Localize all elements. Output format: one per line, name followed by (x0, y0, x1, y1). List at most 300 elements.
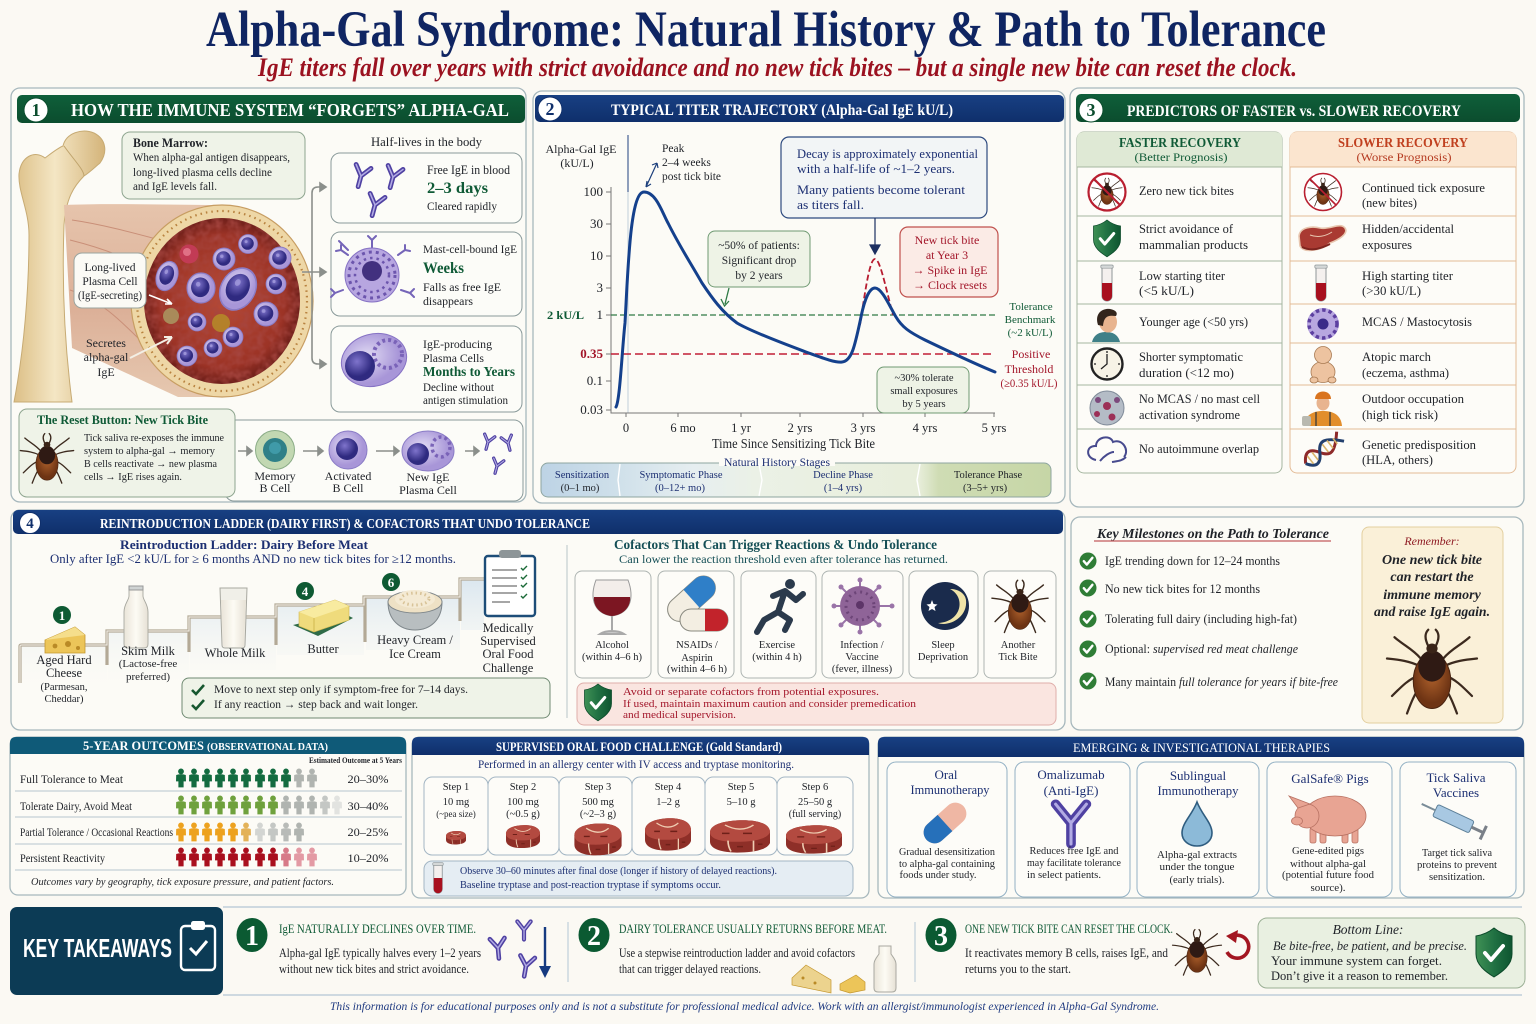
ladder rule box: Move to next step only if symptom-free for 7–14 days. (214, 682, 468, 696)
line chart: IgE titer over time (546, 135, 1006, 451)
table: faster recovery: Strict avoidance of (1139, 222, 1234, 236)
cofactor: sleep deprivation: Sleep (931, 640, 955, 651)
takeaway 3: returns you to the start. (965, 962, 1071, 976)
panel 1: how the immune system forgets (11, 88, 526, 502)
label: secretes alpha-gal IgE: IgE (97, 365, 115, 379)
callout: 30 percent tolerate: small exposures (890, 386, 958, 397)
natural history stages bar: Decline Phase (813, 470, 873, 481)
therapy: sublingual immunotherapy: Immunotherapy (1158, 783, 1239, 798)
callout: decay: Many patients become tolerant (797, 182, 965, 197)
line chart: IgE titer over time: 3 (596, 280, 603, 295)
row: full tolerance (20, 768, 388, 787)
row: partial tolerance: 20–25% (348, 825, 388, 839)
half-life box: mast-cell-bound IgE (331, 232, 522, 316)
pathway: memory B cell to new plasma cell: B Cell (332, 481, 364, 495)
therapy: GalSafe pigs: source). (1310, 882, 1346, 894)
key takeaways badge: KEY TAKEAWAYS (23, 933, 172, 963)
step 2: skim milk: preferred) (126, 671, 170, 683)
callout: reset button: B cells reactivate → new plasma (84, 458, 217, 470)
heading: half-lives: Half-lives in the body (371, 135, 483, 149)
label: positive threshold: Positive (1012, 347, 1050, 361)
step 2: skim milk: (Lactose-free (119, 658, 177, 670)
step 4: butter: Butter (307, 642, 339, 656)
table: faster recovery: Low starting titer (1139, 269, 1226, 283)
row: full tolerance: Full Tolerance to Meat (20, 772, 124, 786)
table: slower recovery (1290, 132, 1516, 473)
takeaway 1: Alpha-gal IgE typically halves every 1–2 years (279, 946, 481, 960)
cofactor: alcohol (575, 571, 651, 678)
callout: long-lived plasma cell: (IgE-secreting) (78, 290, 142, 302)
callout: long-lived plasma cell: Long-lived (84, 262, 136, 274)
takeaway 2: DAIRY TOLERANCE USUALLY RETURNS BEFORE MEAT. (619, 922, 887, 936)
line chart: IgE titer over time: 0.35 (580, 346, 604, 361)
row: tolerate dairy (20, 796, 388, 814)
subtitle: IgE titers fall over years with strict avoidance and no new tick bites – but a single new bite can reset the clock. (257, 53, 1297, 82)
line chart: IgE titer over time: 1 yr (731, 421, 752, 435)
step 6: 25–50 g (798, 797, 833, 808)
line chart: IgE titer over time: 10 (590, 248, 603, 263)
annotation: peak: Peak (662, 143, 685, 155)
natural history stages bar (541, 457, 1051, 497)
icon: younger person (1092, 309, 1120, 342)
step 1: 10 mg (443, 797, 470, 808)
ladder rule box: If any reaction → step back and wait longer. (214, 697, 418, 711)
icon: no ticks (1088, 174, 1126, 210)
callout: 30 percent tolerate (877, 367, 969, 413)
panel 4 header: 4 (26, 516, 34, 532)
cofactors heading: Cofactors That Can Trigger Reactions & Undo Tolerance (614, 538, 937, 553)
step 6: clipboard (480, 550, 537, 675)
step 6: clipboard: Supervised (480, 634, 537, 648)
step 6: clipboard: Medically (483, 621, 534, 635)
half-life box: free IgE (331, 153, 522, 223)
half-life box: free IgE: 2–3 days (427, 180, 488, 197)
step 3: whole milk: Whole Milk (205, 646, 266, 660)
table: slower recovery: SLOWER RECOVERY (1338, 136, 1468, 151)
pathway: memory B cell to new plasma cell: New IgE (407, 470, 449, 484)
step 1: aged hard cheese: Aged Hard (36, 653, 92, 667)
callout: remember: can restart the (1390, 570, 1474, 585)
arrow: 50 percent pointer (721, 288, 729, 306)
panel 3 header (1076, 94, 1520, 122)
callout: new tick bite (900, 227, 998, 297)
therapy: sublingual immunotherapy: Sublingual (1170, 768, 1227, 783)
panel 4: reintroduction ladder and cofactors (11, 510, 1065, 730)
cofactor: another tick bite (984, 571, 1056, 678)
callout: reset button: system to alpha-gal → memory (84, 445, 215, 457)
callout: remember (1362, 527, 1503, 723)
cofactor warning: If used, maintain maximum caution and consider premedication (623, 698, 917, 710)
callout: remember: One new tick bite (1382, 553, 1482, 568)
table: slower recovery: Atopic march (1362, 350, 1432, 364)
therapy: tick saliva vaccines: sensitization. (1429, 871, 1485, 883)
cofactor: sleep deprivation: Deprivation (918, 652, 969, 663)
step 5: heavy cream: Ice Cream (389, 647, 441, 661)
therapy: sublingual immunotherapy: (early trials). (1170, 874, 1225, 886)
half-life box: free IgE: Cleared rapidly (427, 199, 497, 213)
ladder heading: Only after IgE <2 kU/L for ≥ 6 months AND no new tick bites for ≥12 months. (50, 552, 456, 566)
half-life box: IgE-producing plasma cells: Plasma Cells (423, 351, 484, 365)
annotation: peak: post tick bite (662, 171, 721, 183)
panel 4 header: REINTRODUCTION LADDER (DAIRY FIRST) & COFACTORS THAT UNDO TOLERANCE (100, 516, 590, 531)
callout: 50 percent of patients: Significant drop (722, 255, 796, 267)
table: faster recovery: Shorter symptomatic (1139, 350, 1243, 364)
table: slower recovery: Outdoor occupation (1362, 392, 1465, 406)
icon: outdoor worker (1302, 392, 1342, 426)
cofactor: infection: Vaccine (845, 652, 879, 663)
panel 3 header: 3 (1086, 100, 1096, 120)
takeaway 2 (578, 918, 896, 993)
table: faster recovery: Younger age (<50 yrs) (1139, 315, 1248, 329)
row: full tolerance: 20–30% (348, 772, 388, 786)
callout: 50 percent of patients: ~50% of patients: (718, 240, 800, 252)
ladder heading (50, 537, 456, 566)
outcomes header: 5-YEAR OUTCOMES (OBSERVATIONAL DATA) (83, 738, 328, 753)
therapy: omalizumab: Omalizumab (1037, 767, 1105, 782)
label: tolerance benchmark: (~2 kU/L) (1008, 327, 1053, 339)
table: faster recovery: No autoimmune overlap (1139, 442, 1259, 456)
line chart: IgE titer over time: 0 (623, 421, 629, 435)
line chart: IgE titer over time: 30 (590, 216, 603, 231)
step 5: heavy cream: 6 (388, 575, 395, 590)
cofactor: exercise: Exercise (759, 640, 795, 651)
natural history stages bar: (3–5+ yrs) (963, 483, 1008, 494)
half-life box: free IgE: Free IgE in blood (427, 163, 511, 177)
cofactor: exercise: (within 4 h) (752, 652, 802, 663)
panel: supervised oral food challenge: Performed in an allergy center with IV access and tryptase monitoring. (478, 759, 794, 771)
therapy: oral immunotherapy: Gradual desensitization (899, 846, 995, 858)
step 4: 1–2 g (656, 797, 681, 808)
takeaway 1: without new tick bites and strict avoidance. (279, 962, 469, 976)
panel: key milestones (1071, 517, 1523, 730)
pathway: memory B cell to new plasma cell: Activated (325, 469, 371, 483)
bottom line callout (1258, 918, 1525, 988)
milestones list: IgE trending down for 12–24 months (1105, 554, 1280, 568)
step 1: aged hard cheese: Cheese (46, 666, 82, 680)
step 1: aged hard cheese (36, 606, 92, 705)
cofactor warning (577, 683, 1056, 725)
ladder rule box (182, 678, 550, 718)
half-life box: mast-cell-bound IgE: Weeks (423, 260, 464, 277)
half-life box: mast-cell-bound IgE: disappears (423, 294, 473, 308)
callout: remember: Remember: (1403, 534, 1460, 548)
line chart: IgE titer over time: (kU/L) (560, 156, 594, 170)
label: secretes alpha-gal IgE: Secretes (86, 336, 126, 350)
table: slower recovery: (new bites) (1362, 196, 1417, 210)
bottom line callout: Bottom Line: (1333, 922, 1403, 937)
table: slower recovery: exposures (1362, 238, 1412, 252)
panel: 5-year outcomes: Estimated Outcome at 5 Years (309, 755, 403, 765)
therapy: tick saliva vaccines: proteins to prevent (1417, 859, 1497, 871)
natural history stages bar: Symptomatic Phase (639, 470, 723, 481)
line chart: IgE titer over time: 4 yrs (913, 421, 937, 435)
milestones list (1080, 552, 1338, 690)
step 4 (632, 777, 705, 855)
therapy: omalizumab (1015, 762, 1130, 897)
outcomes footnote: Outcomes vary by geography, tick exposure pressure, and patient factors. (31, 876, 334, 888)
step 5 (705, 777, 777, 855)
cofactor warning: Avoid or separate cofactors from potential exposures. (623, 686, 879, 698)
cofactor: infection: Infection / (840, 640, 884, 651)
line chart: IgE titer over time: 2 kU/L (547, 308, 584, 322)
callout: reset button: The Reset Button: New Tick Bite (37, 413, 208, 427)
cofactor: sleep deprivation (909, 571, 978, 678)
takeaway 2: 2 (587, 921, 601, 952)
panel 2 header: 2 (546, 99, 554, 119)
therapy: GalSafe pigs: (potential future food (1282, 869, 1374, 881)
cofactor: infection: (fever, illness) (832, 664, 893, 675)
row: persistent reactivity: 10–20% (348, 851, 388, 865)
illustration: femur bone (14, 131, 105, 402)
pathway: memory B cell to new plasma cell: Memory (254, 469, 296, 483)
row: partial tolerance (20, 822, 388, 841)
row: tolerate dairy: 30–40% (348, 799, 388, 813)
callout: 30 percent tolerate: ~30% tolerate (894, 373, 954, 384)
half-life box: mast-cell-bound IgE: Falls as free IgE (423, 280, 501, 294)
step 3: whole milk (205, 588, 266, 660)
callout: bone marrow (122, 132, 305, 199)
step 1: (~pea size) (436, 809, 476, 819)
pathway: memory B cell to new plasma cell: B Cell (259, 481, 291, 495)
takeaway 3: 3 (934, 921, 948, 952)
panel: supervised oral food challenge (412, 737, 869, 898)
milestones list: Many maintain full tolerance for years if bite-free (1105, 675, 1338, 689)
takeaway 1 (236, 918, 551, 978)
milestones heading: Key Milestones on the Path to Tolerance (1096, 527, 1329, 542)
icon: DNA (1301, 431, 1345, 469)
cofactor warning: and medical supervision. (623, 709, 736, 721)
callout: new tick bite: → Spike in IgE (912, 263, 988, 277)
cofactor: alcohol: Alcohol (595, 640, 629, 651)
takeaway 3: It reactivates memory B cells, raises IgE, and (965, 946, 1169, 960)
callout: bone marrow: long-lived plasma cells decline (133, 167, 272, 179)
takeaway 1: IgE NATURALLY DECLINES OVER TIME. (279, 922, 476, 936)
line chart: IgE titer over time: Alpha-Gal IgE (546, 142, 616, 156)
step 4: butter (293, 582, 353, 656)
line chart: IgE titer over time: 100 (584, 184, 603, 199)
takeaway 2: that can trigger delayed reactions. (619, 962, 761, 976)
callout: long-lived plasma cell (74, 253, 146, 308)
therapy: oral immunotherapy: to alpha-gal containing (899, 858, 995, 870)
line chart: IgE titer over time: 0.03 (580, 402, 603, 417)
therapy: GalSafe pigs (1267, 762, 1392, 897)
therapy: omalizumab: (Anti-IgE) (1044, 783, 1098, 798)
table: slower recovery: Continued tick exposure (1362, 181, 1485, 195)
icon: blood tube (1101, 265, 1113, 301)
bottom line callout: Don’t give it a reason to remember. (1271, 969, 1448, 983)
panel 1 header: HOW THE IMMUNE SYSTEM “FORGETS” ALPHA-GAL (71, 100, 509, 120)
takeaway 3 (926, 918, 1249, 976)
therapy: sublingual immunotherapy: under the tongue (1160, 861, 1235, 873)
takeaway 2: Use a stepwise reintroduction ladder and avoid cofactors (619, 946, 855, 960)
therapy: omalizumab: in select patients. (1027, 869, 1101, 881)
bottom line callout: Be bite-free, be patient, and be precise. (1273, 939, 1467, 953)
table: slower recovery: Genetic predisposition (1362, 438, 1477, 452)
line chart: IgE titer over time: 6 mo (670, 421, 696, 435)
step 2 (488, 777, 559, 855)
callout: bone marrow: When alpha-gal antigen disappears, (133, 152, 290, 164)
table: slower recovery: (high tick risk) (1362, 408, 1438, 422)
table: faster recovery (1077, 132, 1282, 473)
step 4: butter: 4 (302, 584, 309, 599)
ladder stairs (20, 579, 484, 690)
therapy: sublingual immunotherapy (1137, 762, 1259, 897)
therapy: oral immunotherapy: Immunotherapy (910, 782, 990, 797)
label: positive threshold: (≥0.35 kU/L) (1000, 378, 1058, 390)
panel 1 header: 1 (32, 100, 40, 120)
callout: new tick bite: → Clock resets (913, 278, 987, 292)
line chart: IgE titer over time: Time Since Sensitizing Tick Bite (712, 436, 875, 451)
table: faster recovery: (<5 kU/L) (1139, 284, 1194, 298)
step 3 (559, 777, 632, 855)
icon: MCAS cell (1307, 308, 1339, 340)
ladder heading: Reintroduction Ladder: Dairy Before Meat (120, 537, 369, 552)
table: faster recovery: Zero new tick bites (1139, 184, 1234, 198)
reset pathway frame (225, 420, 523, 501)
cofactors heading: Can lower the reaction threshold even after tolerance has returned. (619, 552, 948, 566)
annotation: peak (646, 143, 721, 187)
panel: emerging therapies (878, 737, 1524, 898)
therapy: GalSafe pigs: Gene-edited pigs (1292, 845, 1364, 857)
callout: remember: and raise IgE again. (1374, 605, 1490, 620)
therapy: tick saliva vaccines: Target tick saliva (1422, 847, 1492, 859)
row: partial tolerance: Partial Tolerance / Occasional Reactions (20, 827, 173, 839)
pathway: memory B cell to new plasma cell: Plasma Cell (399, 483, 457, 497)
icon: mast cell (1090, 391, 1124, 425)
therapy: tick saliva vaccines: Vaccines (1433, 785, 1479, 800)
step 2: Step 2 (510, 782, 536, 793)
outcomes header (10, 737, 406, 754)
pathway: memory B cell to new plasma cell (238, 430, 515, 497)
cofactor: NSAIDs (658, 571, 734, 678)
icon: clock (1092, 348, 1122, 380)
therapy: omalizumab: Reduces free IgE and (1030, 845, 1119, 857)
arrows: bracket to half-life boxes (302, 183, 326, 368)
half-life box: mast-cell-bound IgE: Mast-cell-bound IgE (423, 242, 517, 256)
step 1: aged hard cheese: 1 (59, 608, 65, 623)
icon: atopic infant (1310, 346, 1336, 383)
half-life box: IgE-producing plasma cells (331, 326, 522, 412)
step 2: skim milk: Skim Milk (121, 644, 176, 658)
therapy: omalizumab: may facilitate tolerance (1027, 857, 1121, 869)
callout: decay: as titers fall. (797, 197, 864, 212)
natural history stages bar: (0–1 mo) (561, 483, 600, 494)
table: faster recovery: FASTER RECOVERY (1119, 136, 1241, 151)
label: tolerance benchmark (1005, 301, 1056, 339)
label: positive threshold (1000, 347, 1058, 390)
line chart: IgE titer over time: 3 yrs (851, 421, 875, 435)
bottom line callout: Your immune system can forget. (1271, 954, 1442, 968)
cofactor: alcohol: (within 4–6 h) (582, 652, 643, 663)
step 1 (424, 777, 488, 855)
table: slower recovery: Hidden/accidental (1362, 222, 1455, 236)
table: slower recovery: High starting titer (1362, 269, 1454, 283)
cofactor: NSAIDs: (within 4–6 h) (667, 664, 728, 675)
table: slower recovery: (HLA, others) (1362, 453, 1433, 467)
label: tolerance benchmark: Tolerance (1009, 301, 1053, 313)
half-life box: IgE-producing plasma cells: Decline without (423, 382, 495, 394)
therapy: GalSafe pigs: without alpha-gal (1290, 858, 1366, 870)
therapies header: EMERGING & INVESTIGATIONAL THERAPIES (1073, 740, 1330, 755)
table: slower recovery: (>30 kU/L) (1362, 284, 1421, 298)
callout: decay (781, 137, 987, 218)
step 1: Step 1 (443, 782, 469, 793)
step 3: Step 3 (585, 782, 611, 793)
table: faster recovery: mammalian products (1139, 238, 1248, 252)
callout: decay: with a half-life of ~1–2 years. (797, 161, 955, 176)
icon: autoimmune loop (1088, 437, 1126, 462)
panel 2 header (535, 95, 1064, 122)
illustration: bone marrow cross-section (64, 204, 313, 397)
natural history stages bar: Sensitization (555, 470, 610, 481)
callout: new tick bite: New tick bite (915, 233, 979, 247)
step 1: aged hard cheese: (Parmesan, (41, 682, 87, 693)
milestones list: No new tick bites for 12 months (1105, 582, 1260, 596)
panel 2 header: TYPICAL TITER TRAJECTORY (Alpha-Gal IgE kU/L) (611, 102, 953, 119)
key takeaways badge (10, 907, 223, 995)
table: faster recovery: No MCAS / no mast cell (1139, 392, 1261, 406)
step 6: Step 6 (802, 782, 828, 793)
panel 3: predictors (1070, 88, 1524, 507)
line chart: IgE titer over time: 0.1 (587, 373, 603, 388)
step 1: aged hard cheese: Cheddar) (44, 694, 84, 705)
step 6 (777, 777, 853, 855)
callout: 30 percent tolerate: by 5 years (902, 399, 946, 410)
step 4: Step 4 (655, 782, 682, 793)
label: secretes alpha-gal IgE: alpha-gal (84, 350, 129, 364)
challenge header: SUPERVISED ORAL FOOD CHALLENGE (Gold Standard) (496, 740, 782, 754)
therapy: sublingual immunotherapy: Alpha-gal extracts (1157, 849, 1237, 861)
therapy: tick saliva vaccines: Tick Saliva (1426, 770, 1486, 785)
row: persistent reactivity: Persistent Reactivity (20, 851, 105, 865)
natural history stages bar: Natural History Stages (724, 457, 831, 469)
callout: new tick bite: at Year 3 (926, 248, 968, 262)
panel 1 header (17, 95, 525, 123)
natural history stages bar: (0–12+ mo) (655, 483, 705, 494)
panel: 5-year outcomes (10, 737, 406, 895)
step 5: 5–10 g (727, 797, 756, 808)
icon: cheese and milk (792, 946, 896, 993)
panel 2: titer trajectory (533, 91, 1065, 503)
step 6: (full serving) (789, 809, 841, 820)
row: tolerate dairy: Tolerate Dairy, Avoid Meat (20, 799, 133, 813)
table: faster recovery: (Better Prognosis) (1134, 150, 1228, 164)
step 3: (~2–3 g) (580, 809, 617, 820)
step 2: (~0.5 g) (506, 809, 540, 820)
step 6: clipboard: Challenge (483, 661, 534, 675)
therapy: tick saliva vaccines (1400, 762, 1516, 897)
therapy: oral immunotherapy (887, 762, 1007, 897)
callout: bone marrow: Bone Marrow: (133, 136, 208, 150)
therapy: oral immunotherapy: foods under study. (900, 869, 977, 881)
step 3: 500 mg (582, 797, 615, 808)
panel 3 header: PREDICTORS OF FASTER vs. SLOWER RECOVERY (1127, 103, 1461, 120)
disclaimer: This information is for educational purposes only and is not a substitute for professional medical advice. Work with an allergist/immunologist experienced in Alpha-Gal Syndrome. (330, 1001, 1159, 1013)
row: persistent reactivity (20, 848, 388, 866)
line chart: IgE titer over time: 1 (596, 307, 603, 322)
cofactor: another tick bite: Tick Bite (998, 652, 1038, 663)
icon: high titer tube (1315, 265, 1327, 301)
table: slower recovery: (eczema, asthma) (1362, 366, 1449, 380)
observation note (424, 861, 853, 896)
cofactor: infection (822, 571, 903, 678)
step 2: 100 mg (507, 797, 540, 808)
step 2: skim milk (119, 586, 177, 683)
label: secretes alpha-gal IgE (84, 336, 129, 379)
callout: reset button: cells → IgE rises again. (84, 471, 182, 483)
cofactor: NSAIDs: Aspirin (681, 653, 714, 664)
callout: remember: immune memory (1383, 588, 1482, 603)
